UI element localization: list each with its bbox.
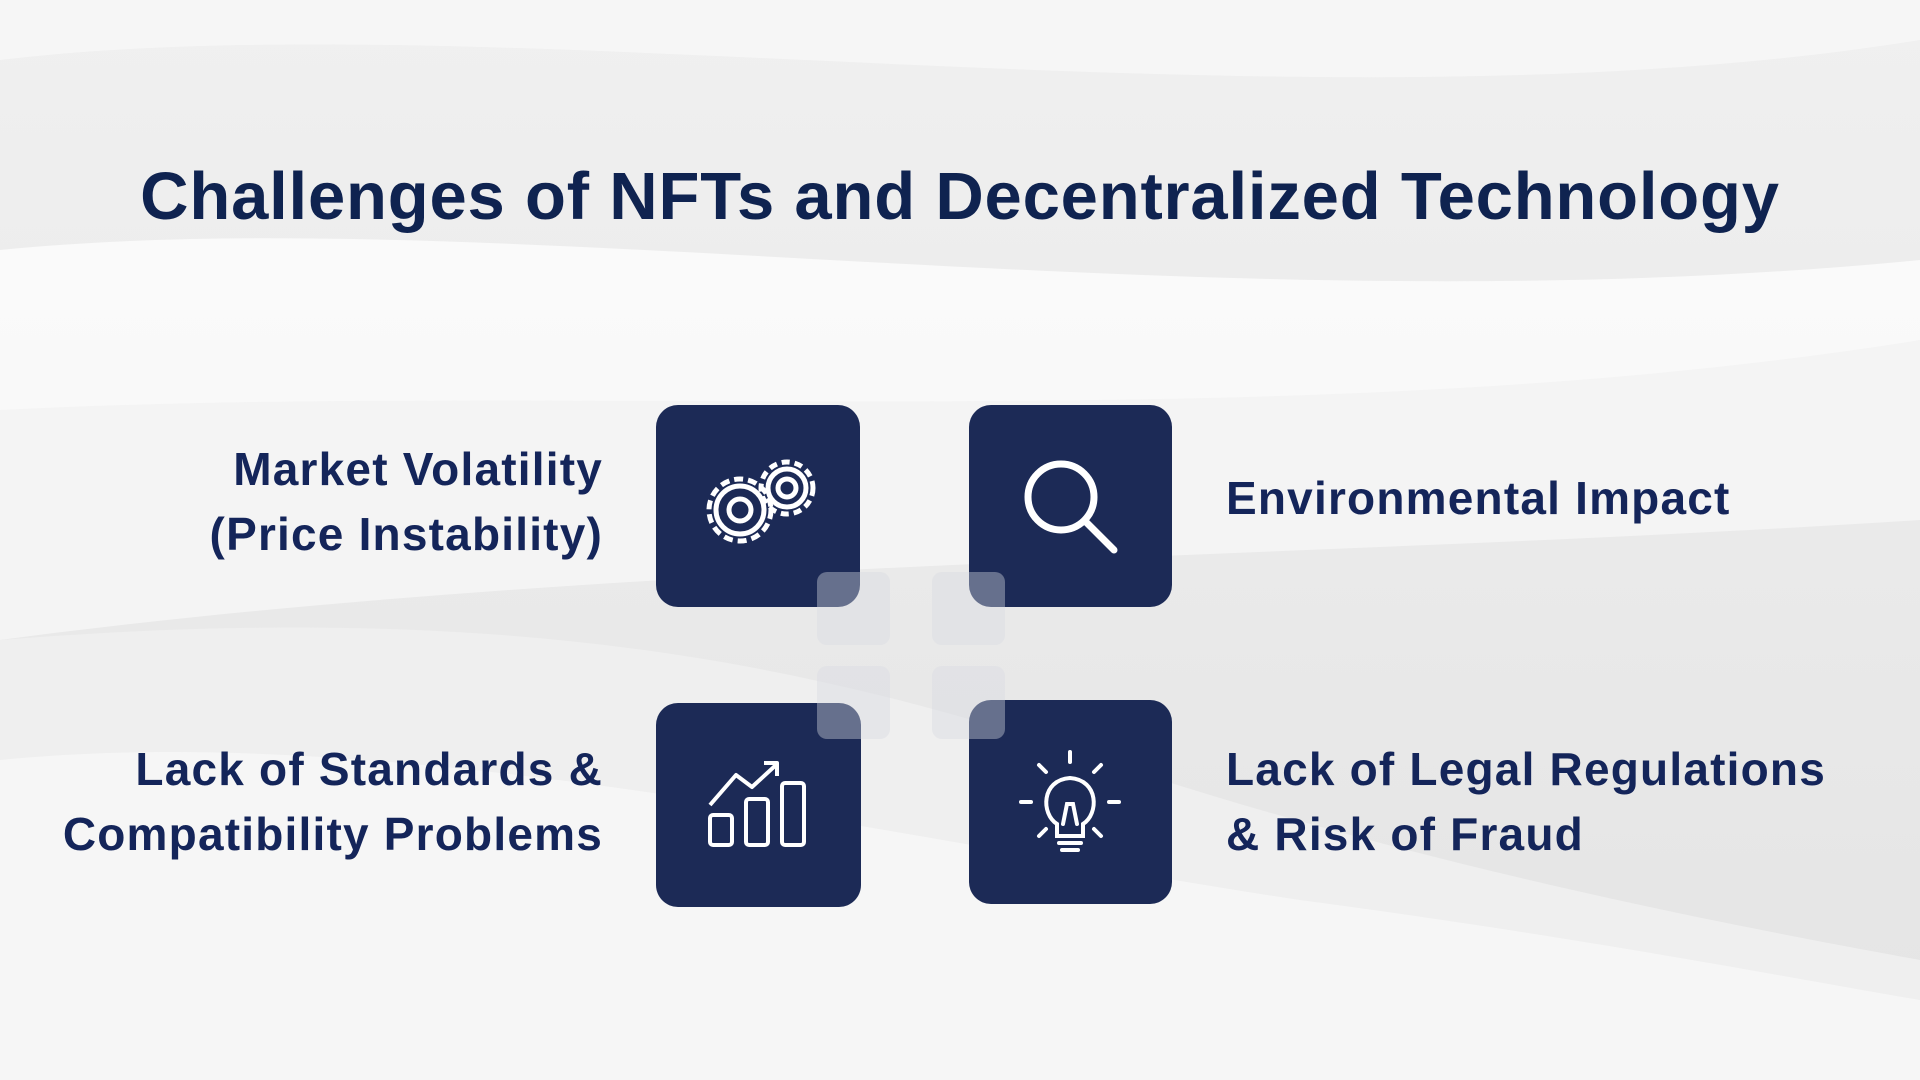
- title: Challenges of NFTs and Decentralized Technology: [140, 159, 1780, 234]
- icon box: magnifier: [969, 405, 1172, 607]
- icon box: growth chart: [656, 703, 861, 907]
- label: standards: Lack of Standards &: [135, 743, 603, 795]
- icon box: gears: [656, 405, 860, 607]
- label: environmental impact: Environmental Impact: [1226, 472, 1731, 524]
- label: market volatility: Market Volatility: [233, 443, 603, 495]
- label: legal regulations: [1226, 743, 1826, 860]
- icon box: light bulb: [969, 700, 1172, 904]
- label: legal regulations: & Risk of Fraud: [1226, 808, 1584, 860]
- label: legal regulations: Lack of Legal Regulations: [1226, 743, 1826, 795]
- label: market volatility: (Price Instability): [210, 508, 603, 560]
- label: market volatility: [210, 443, 603, 560]
- label: standards: [63, 743, 603, 860]
- ghost squares: [817, 572, 1005, 739]
- label: standards: Compatibility Problems: [63, 808, 603, 860]
